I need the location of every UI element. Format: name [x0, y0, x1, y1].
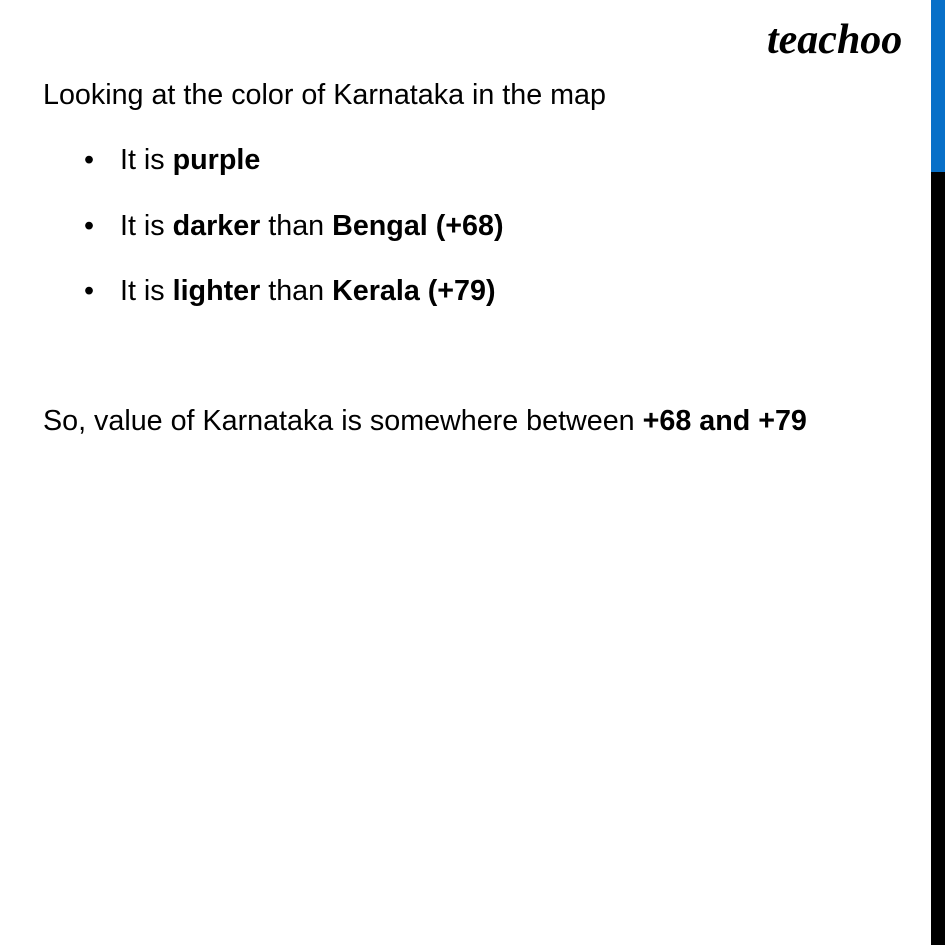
conclusion: So, value of Karnataka is somewhere between +68 and +79 — [43, 405, 807, 437]
intro text: Looking at the color of Karnataka in the map — [43, 79, 606, 111]
bullet 3 — [84, 275, 496, 307]
side bar: black — [931, 172, 945, 945]
text: It is purple — [120, 144, 260, 176]
logo: teachoo — [767, 17, 902, 63]
text: It is lighter than Kerala (+79) — [120, 275, 496, 307]
text: It is darker than Bengal (+68) — [120, 210, 504, 242]
bullet 1 — [84, 144, 260, 176]
bullet 1: • — [84, 144, 94, 176]
bullet 2 — [84, 210, 504, 242]
side bar: blue — [931, 0, 945, 172]
bullet 3: • — [84, 275, 94, 307]
bullet 2: • — [84, 210, 94, 242]
